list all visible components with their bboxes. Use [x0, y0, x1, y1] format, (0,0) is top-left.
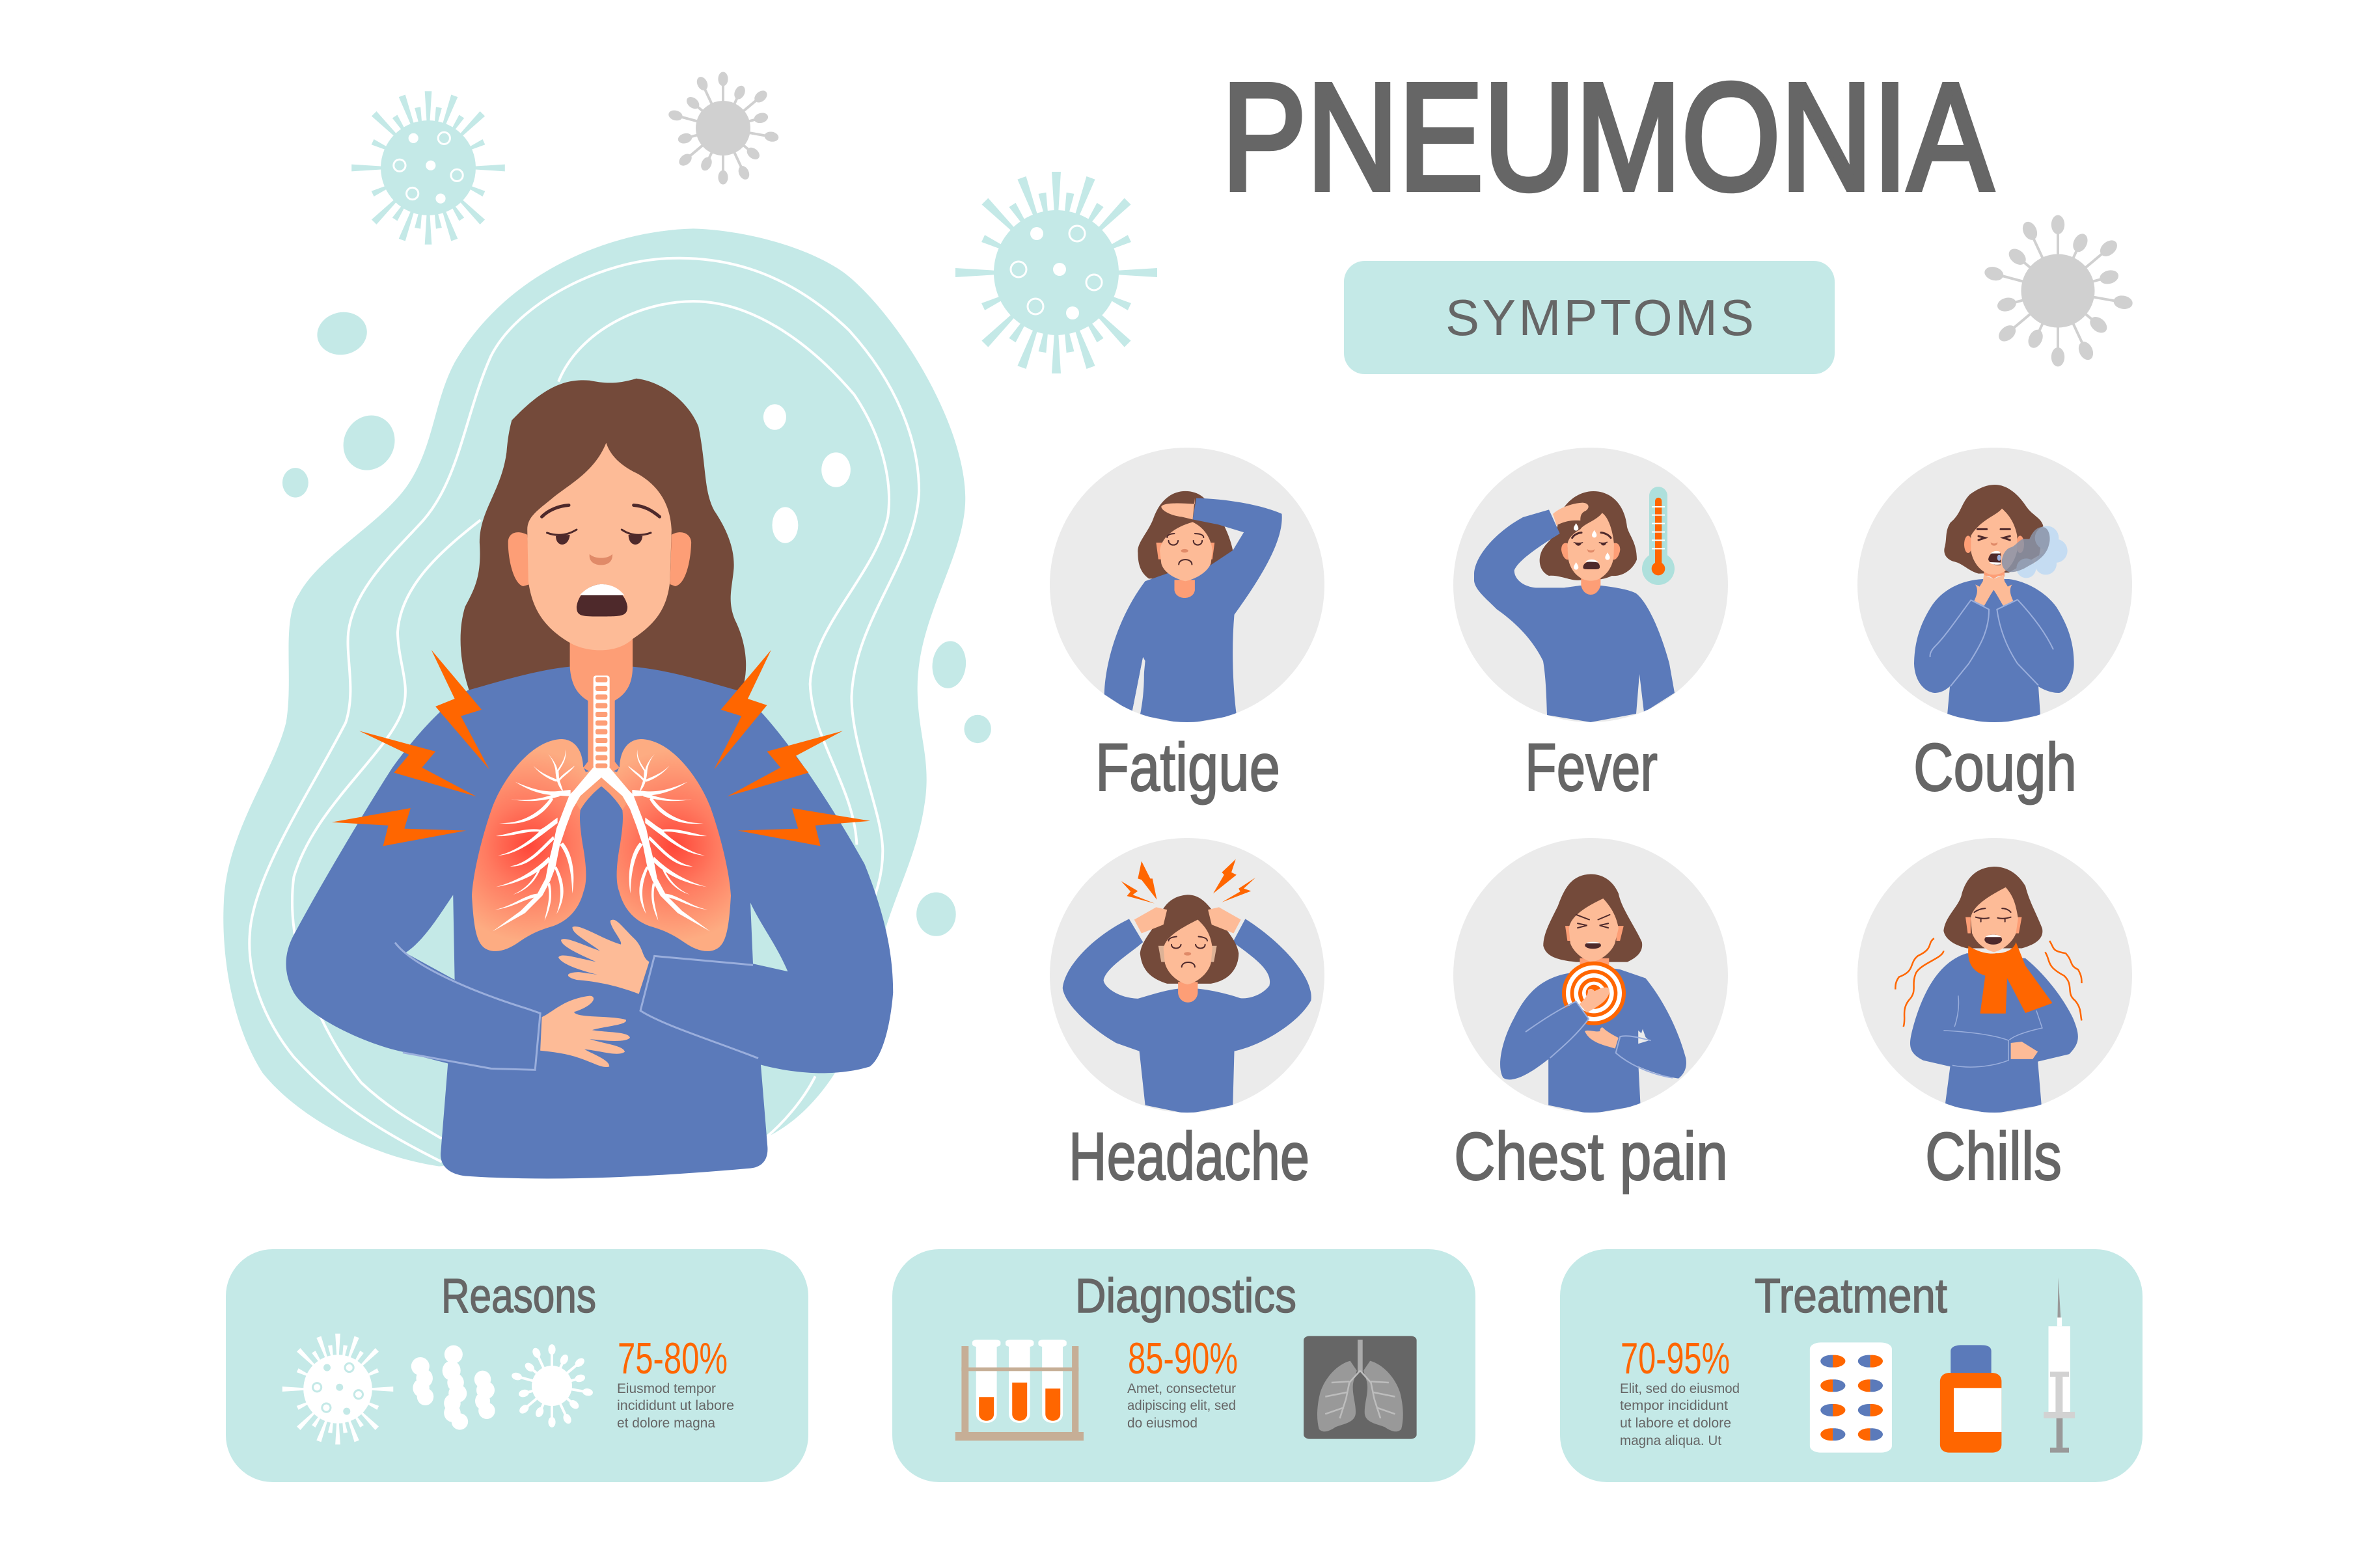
description: diagnostics: adipiscing elit, sed: [1127, 1398, 1236, 1413]
icon: round virus: [511, 1344, 594, 1427]
right lung: [601, 692, 731, 951]
droplets: [282, 310, 991, 936]
thermometer: [1642, 487, 1675, 585]
fever eyes: [1572, 533, 1611, 546]
cough mouth: [1988, 551, 2001, 565]
heading: diagnostics: Diagnostics: [1075, 1269, 1296, 1323]
cough face: [1971, 509, 2017, 574]
hands: [540, 920, 650, 1067]
stat: 70-95%: 70-95%: [1621, 1334, 1730, 1383]
panel: diagnostics: [892, 1249, 1475, 1482]
arm gaps: [405, 895, 787, 980]
fever sweater: [1474, 509, 1675, 722]
description: reasons: incididunt ut labore: [617, 1398, 734, 1413]
title: PNEUMONIA: [1222, 51, 1993, 222]
forearm sleeve: [1526, 1001, 1589, 1058]
sleeve outlines: [395, 943, 758, 1070]
fever hair: [1540, 491, 1637, 580]
virus: grey right: [1983, 215, 2133, 366]
virus: mint large: [955, 172, 1157, 373]
virus: mint top left: [351, 91, 505, 245]
description: treatment: magna aliqua. Ut: [1620, 1433, 1721, 1448]
cough sleeve lines: [1930, 600, 2053, 686]
fever ears: [1561, 543, 1620, 560]
upper hand: [1580, 988, 1609, 1013]
symptom: cough: [1857, 448, 2132, 724]
symptom: fatigue: [1050, 448, 1324, 724]
cough neck: [1984, 571, 2005, 579]
description: treatment: [1620, 1381, 1740, 1448]
symptom: chills: [1857, 838, 2132, 1114]
armpit gap: [1640, 1029, 1646, 1039]
cough cloud: [1997, 526, 2068, 578]
icon: medicine bottle: [1940, 1345, 2001, 1453]
cough hair: [1944, 485, 2044, 574]
description: treatment: Elit, sed do eiusmod: [1620, 1381, 1740, 1396]
heading: reasons: Reasons: [441, 1269, 596, 1323]
stat: 85-90%: 85-90%: [1128, 1334, 1238, 1383]
description: reasons: [617, 1381, 734, 1431]
cough eyes: [1977, 529, 2010, 540]
fever neck: [1581, 578, 1601, 595]
symptom: chest pain: [1453, 838, 1728, 1114]
panel: reasons: [226, 1249, 808, 1482]
fever mouth: [1583, 560, 1600, 569]
heading: treatment: Treatment: [1755, 1269, 1947, 1323]
fever face: [1567, 513, 1614, 581]
symptoms heading badge: [1344, 261, 1835, 374]
description: diagnostics: do eiusmod: [1127, 1416, 1198, 1431]
icon: syringe: [2044, 1277, 2075, 1453]
pain lightning bolts: [332, 650, 870, 846]
label: chest pain: Chest pain: [1454, 1119, 1728, 1195]
lungs and trachea: [472, 675, 731, 951]
cough hands: [1974, 574, 2013, 606]
fever hand: [1553, 503, 1589, 525]
label: headache: Headache: [1069, 1119, 1309, 1195]
cough ears: [1964, 535, 1971, 553]
pain target: [1562, 962, 1626, 1025]
description: treatment: tempor incididunt: [1620, 1398, 1728, 1413]
description: reasons: Eiusmod tempor: [617, 1381, 716, 1396]
lower hand: [1585, 1027, 1619, 1049]
main illustration: woman with inflamed lungs: [223, 228, 991, 1179]
cough sweater: [1914, 579, 2074, 724]
symptoms heading badge: SYMPTOMS: [1445, 289, 1754, 346]
background blob: [223, 228, 965, 1167]
label: chills: Chills: [1925, 1119, 2062, 1195]
eyes and brows: [542, 505, 659, 545]
description: treatment: ut labore et dolore: [1620, 1416, 1731, 1431]
description: reasons: et dolore magna: [617, 1416, 715, 1431]
face: [527, 443, 672, 650]
left lung: [472, 692, 601, 951]
ears: [508, 532, 691, 586]
sweater: [286, 667, 893, 1179]
icon: bacteria chains: [411, 1345, 495, 1430]
panel: treatment: [1560, 1249, 2143, 1482]
label: fatigue: Fatigue: [1095, 730, 1280, 805]
symptom: fever: [1453, 448, 1728, 722]
cough nose: [1991, 542, 1997, 546]
description: diagnostics: [1127, 1381, 1236, 1431]
trachea: [594, 675, 610, 769]
icon: blister pack: [1810, 1342, 1892, 1453]
chest sleeve lines: [1526, 1001, 1673, 1078]
description: diagnostics: Amet, consectetur: [1127, 1381, 1236, 1396]
neck: [570, 632, 633, 707]
stat: 75-80%: 75-80%: [618, 1334, 728, 1383]
label: cough: Cough: [1913, 730, 2077, 805]
icon: spiky virus: [282, 1334, 393, 1444]
mouth: [577, 584, 627, 616]
blob contour lines: [249, 258, 919, 1162]
virus: grey top: [667, 72, 780, 185]
fever nose: [1587, 549, 1595, 552]
nose: [590, 554, 612, 565]
hair: [461, 379, 746, 700]
icon: lung x-ray: [1304, 1336, 1417, 1439]
symptom: headache: [1050, 838, 1324, 1114]
sweat drops: [1574, 523, 1610, 570]
icon: test tubes: [955, 1340, 1084, 1440]
white droplets: [763, 404, 851, 543]
label: fever: Fever: [1525, 730, 1658, 805]
